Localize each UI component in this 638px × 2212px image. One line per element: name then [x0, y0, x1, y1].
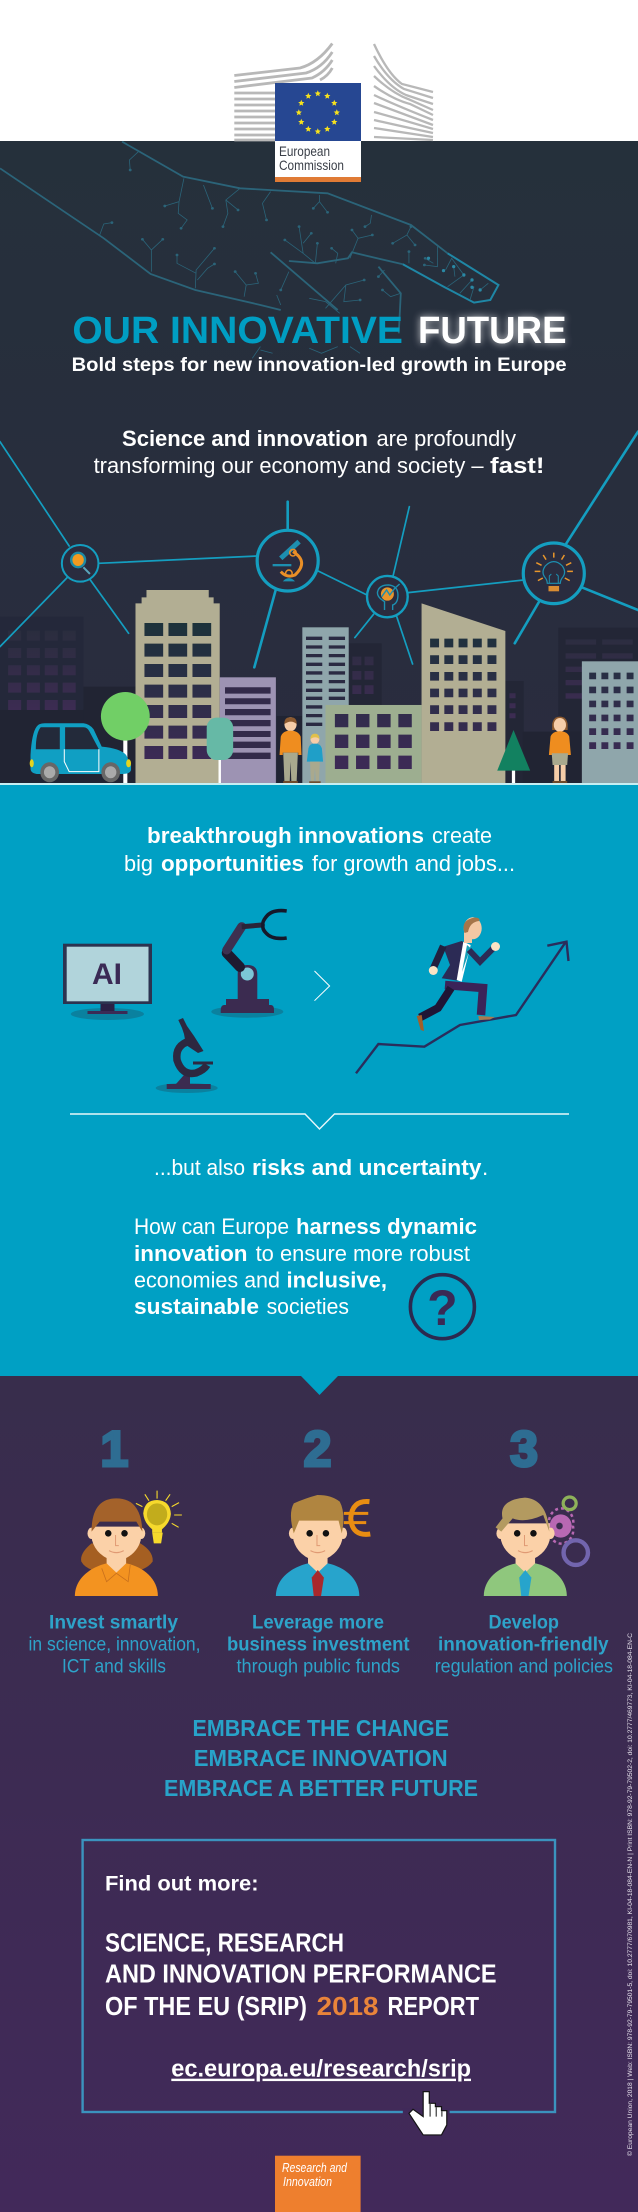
text: breakthrough innovations: big: [124, 851, 153, 876]
text: risks and uncertainty: [154, 1155, 488, 1180]
green round tree: [101, 692, 150, 783]
step 1 text: [28, 1613, 200, 1678]
logo: Berlaymont building right wing: [374, 44, 433, 140]
tall beige building: [135, 590, 220, 783]
dark green pine tree: [497, 730, 530, 783]
icon: robot arm: [211, 911, 287, 1018]
call-to-action box: [83, 1840, 555, 2112]
network lines: [0, 432, 638, 667]
step 2 text: business investment: [227, 1635, 410, 1656]
text: breakthrough innovations: create: [432, 823, 492, 848]
embrace slogan: EMBRACE INNOVATION: [194, 1745, 448, 1771]
report title: AND INNOVATION PERFORMANCE: [105, 1961, 497, 1989]
title: FUTURE: [418, 310, 566, 352]
step 3 text: regulation and policies: [435, 1657, 613, 1678]
panel: white header: [0, 0, 638, 141]
car: [30, 723, 131, 782]
icon: pointer hand: [403, 2092, 450, 2135]
angled beige building: [422, 603, 505, 783]
icon: woman with lightbulb: [75, 1491, 182, 1596]
report title: [105, 1930, 497, 2021]
divider with notch: [70, 1114, 569, 1129]
right grey building: [582, 661, 638, 783]
step 3 text: Develop: [488, 1613, 559, 1634]
figure: running businessman: [417, 917, 500, 1031]
report title: 2018: [317, 1993, 378, 2021]
text: how can Europe: inclusive,: [286, 1268, 387, 1293]
text: breakthrough innovations: for growth and jobs...: [312, 851, 515, 876]
intro text: are profoundly: [376, 426, 517, 451]
step 2 text: through public funds: [236, 1657, 400, 1678]
green low building: [326, 705, 422, 783]
person: woman: [549, 717, 571, 783]
url: ec.europa.eu/research/srip: [171, 2056, 471, 2083]
step numbers: 3: [510, 1421, 538, 1477]
orange tab: Research and Innovation: [275, 2156, 361, 2212]
logo: label plate: [275, 141, 361, 177]
step numbers: 2: [304, 1421, 331, 1477]
text: risks and uncertainty: .: [482, 1155, 488, 1180]
find out more: Find out more:: [105, 1872, 258, 1896]
title: [72, 310, 567, 352]
embrace slogan: [164, 1715, 478, 1801]
report title: SCIENCE, RESEARCH: [105, 1930, 344, 1958]
icon: question mark: [410, 1275, 474, 1339]
icon: man with gears: [484, 1497, 588, 1596]
text: how can Europe: sustainable: [134, 1294, 259, 1319]
embrace slogan: EMBRACE A BETTER FUTURE: [164, 1775, 478, 1801]
network node: lightbulb: [523, 543, 584, 604]
title: OUR INNOVATIVE: [72, 310, 403, 352]
network node: magnifier: [62, 545, 98, 582]
icon: AI monitor: AI: [92, 958, 122, 991]
intro text: transforming our economy and society –: [94, 453, 484, 478]
step 1 text: in science, innovation,: [28, 1635, 200, 1656]
embrace slogan: EMBRACE THE CHANGE: [192, 1715, 449, 1741]
text: breakthrough innovations: breakthrough innovations: [147, 823, 424, 848]
text: how can Europe: economies and: [134, 1268, 280, 1293]
step numbers: 1: [100, 1421, 128, 1477]
logo: label text: Commission: [279, 157, 344, 173]
panel: dark hero background: [0, 141, 638, 783]
text: breakthrough innovations: [124, 823, 515, 876]
tab label: [282, 2160, 348, 2189]
step numbers: [100, 1421, 538, 1477]
logo: label text: European: [279, 143, 330, 159]
person: child: [307, 734, 323, 783]
purple building: [220, 677, 276, 783]
logo: EU flag: [275, 83, 361, 141]
intro text: [94, 426, 544, 478]
city illustration: [0, 432, 638, 783]
copyright vertical text: © European Union, 2018 | Web: ISBN: 978-92-79-79501-5, doi: 10.2777/670981, KI-04-18-084-EN-N | Print ISBN: 978-92-79-79502-2, doi: 10.2777/469773, KI-04-18-084-EN-C: [627, 1632, 634, 2156]
background dark buildings: [0, 617, 638, 783]
arrow: section notch: [301, 1376, 338, 1395]
icon: microscope: [156, 1018, 218, 1093]
person: man: [280, 717, 302, 783]
logo: European Commission: [234, 44, 433, 182]
illustration: circuit hand: [0, 142, 498, 358]
report title: OF THE EU (SRIP): [105, 1993, 307, 2021]
step 2 text: [227, 1613, 410, 1678]
network node: microscope: [257, 530, 318, 591]
step 1 text: Invest smartly: [49, 1613, 178, 1634]
text: risks and uncertainty: ...but also: [154, 1155, 245, 1180]
panel: purple section background: [0, 1376, 638, 2212]
step 3 text: innovation-friendly: [438, 1635, 609, 1656]
logo: orange bar: [275, 177, 361, 182]
icon: man with euro: [276, 1495, 370, 1596]
panel: teal section background: [0, 785, 638, 1376]
logo: label text: [279, 143, 344, 173]
intro text: fast!: [490, 453, 544, 478]
text: breakthrough innovations: opportunities: [161, 851, 304, 876]
step 2 text: Leverage more: [252, 1613, 384, 1634]
text: how can Europe: societies: [267, 1294, 349, 1319]
report title: REPORT: [388, 1993, 479, 2021]
slim grey building: [302, 627, 349, 783]
intro text: Science and innovation: [122, 426, 368, 451]
text: how can Europe: innovation: [134, 1241, 248, 1266]
text: how can Europe: to ensure more robust: [256, 1241, 471, 1266]
text: risks and uncertainty: risks and uncertainty: [252, 1155, 482, 1180]
arrow: chevron: [314, 971, 330, 1001]
step 3 text: [435, 1613, 613, 1678]
chart: growth arrow: [356, 942, 568, 1073]
ground line: [0, 783, 638, 785]
icon: AI monitor: [63, 944, 152, 1020]
tab label: Innovation: [283, 2174, 332, 2189]
text: how can Europe: [134, 1214, 477, 1319]
step 1 text: ICT and skills: [62, 1657, 166, 1678]
subtitle: Bold steps for new innovation-led growth in Europe: [72, 354, 567, 376]
teal tree: [207, 718, 233, 783]
people icons: [75, 1491, 588, 1596]
icon: question mark: ?: [427, 1280, 458, 1336]
tab label: Research and: [282, 2160, 348, 2175]
logo: EU stars: [296, 90, 340, 134]
logo: Berlaymont building left wing: [234, 44, 332, 140]
text: how can Europe: How can Europe: [134, 1214, 289, 1239]
network node: head with chart: [367, 576, 408, 617]
text: how can Europe: harness dynamic: [296, 1214, 477, 1239]
